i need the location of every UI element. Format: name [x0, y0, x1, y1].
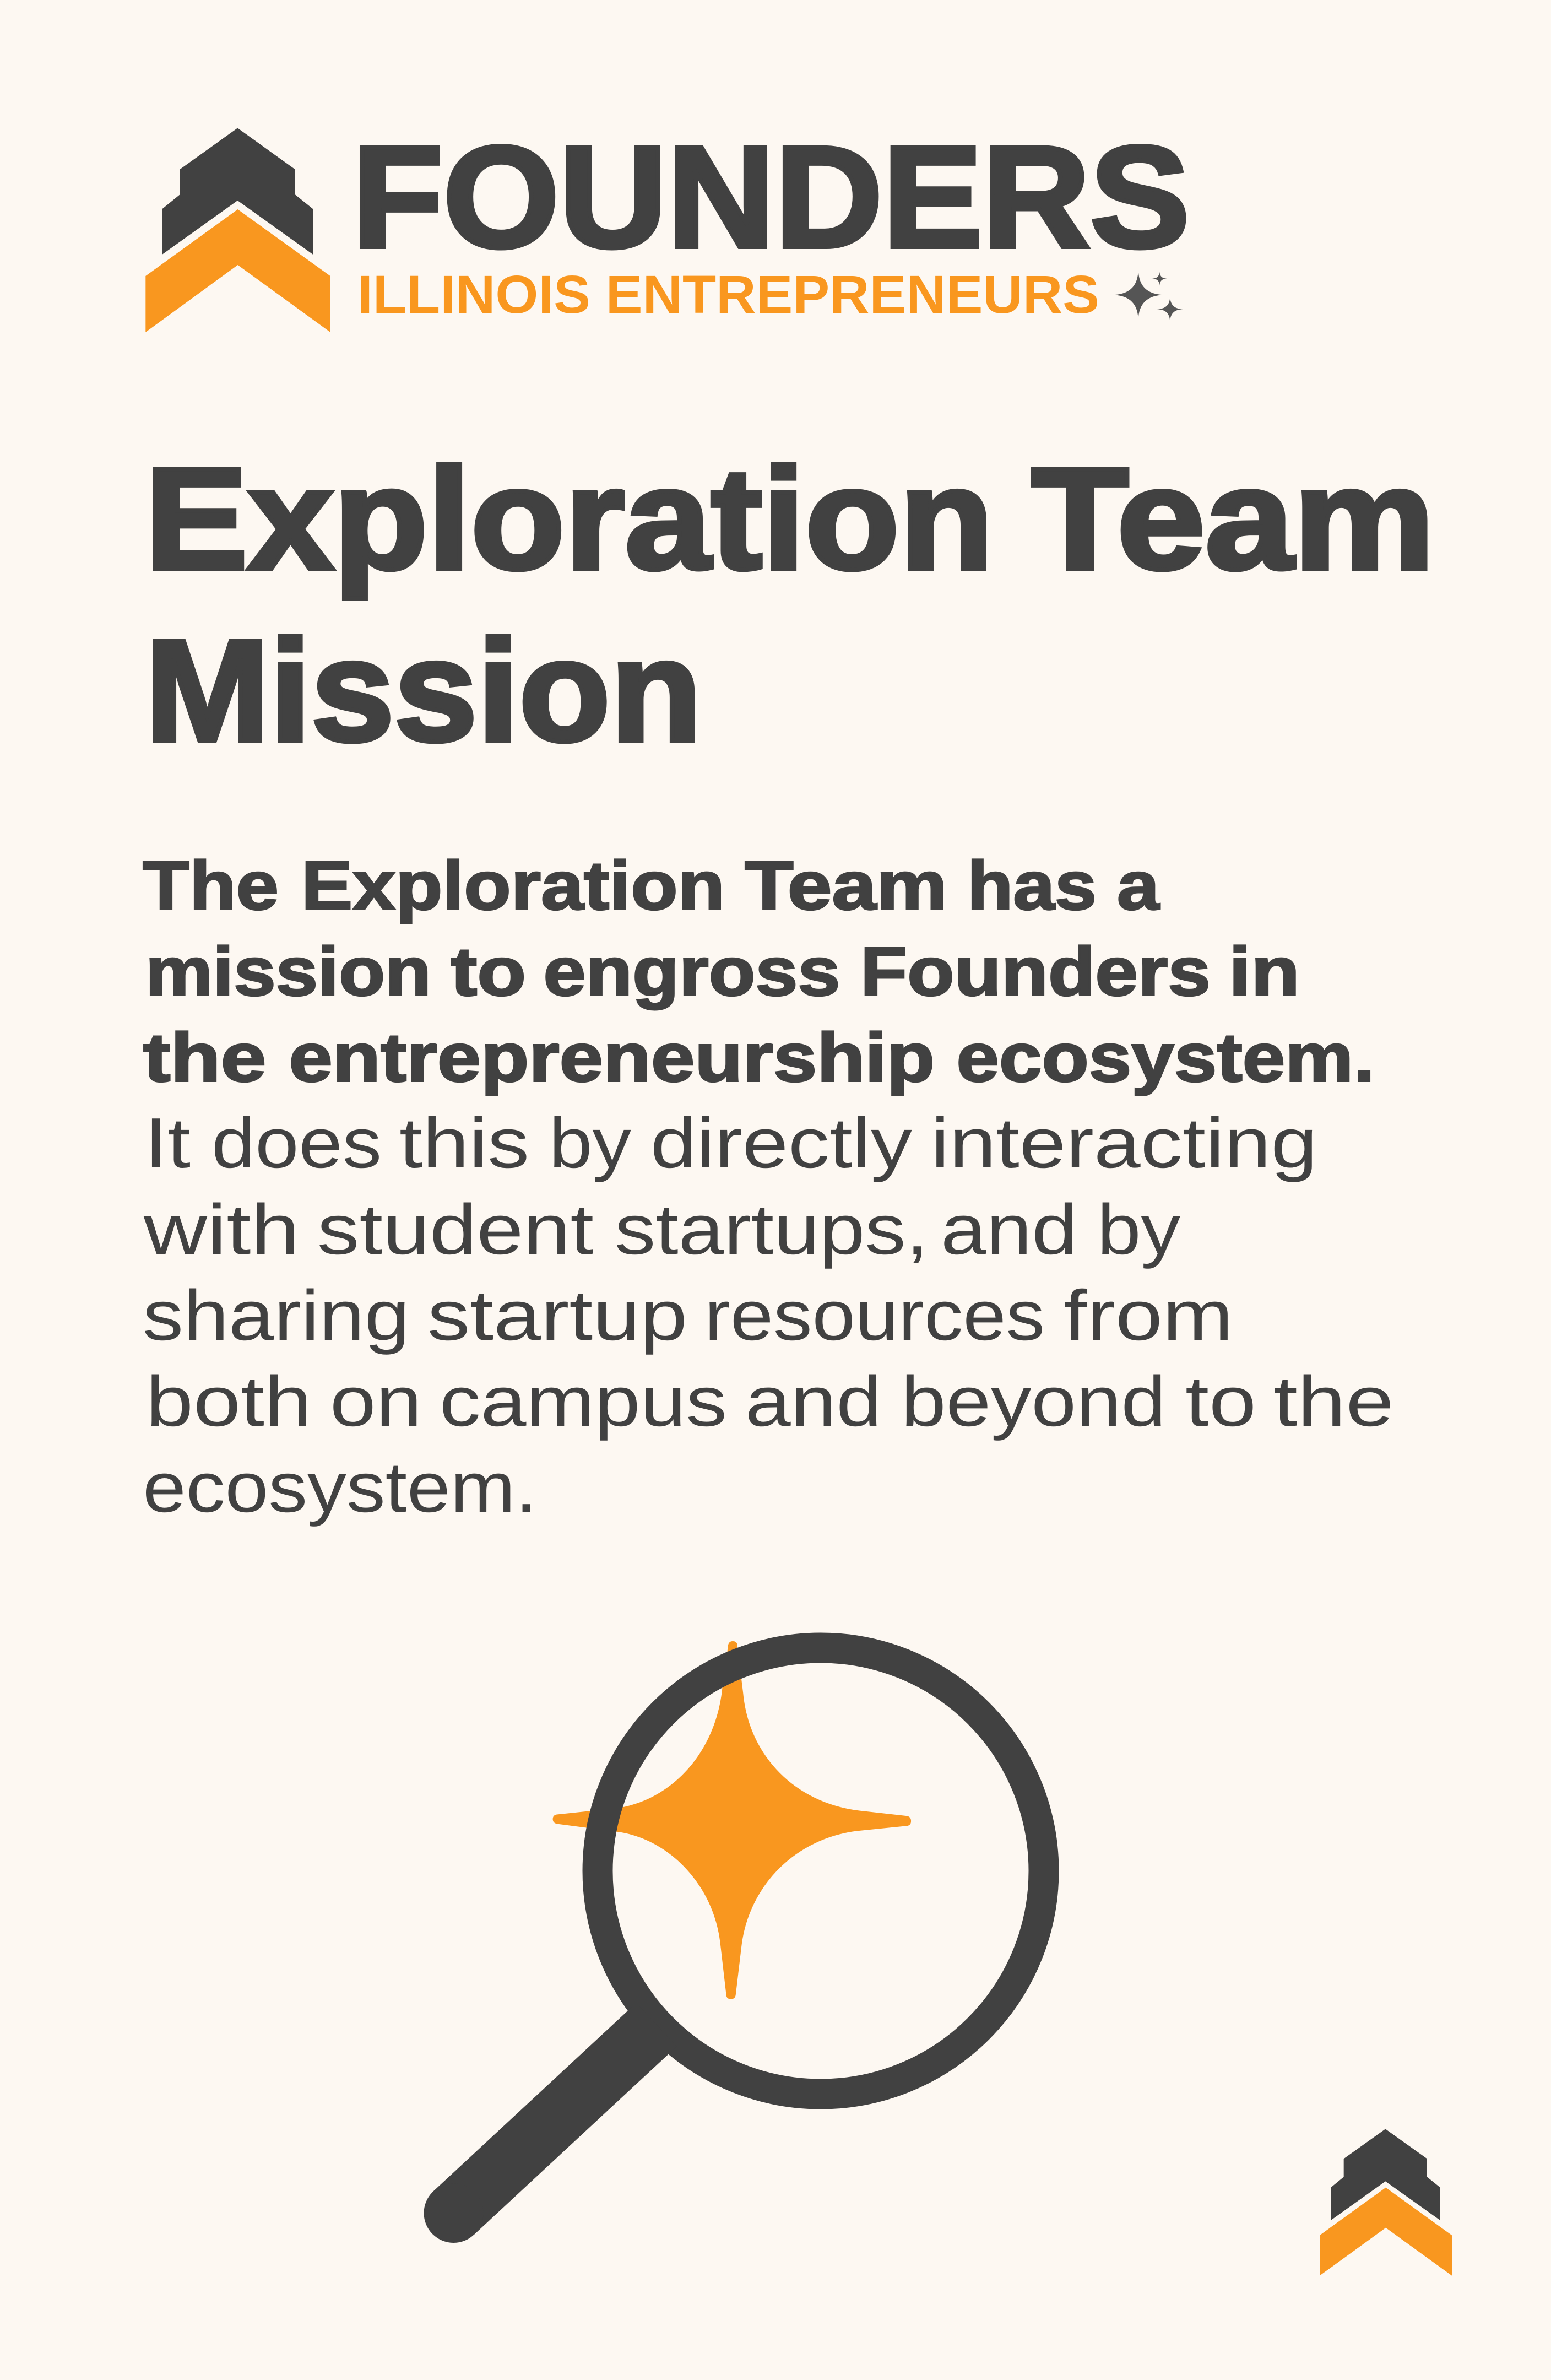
regular body text: It — [144, 1104, 191, 1183]
regular body text: and — [745, 1362, 882, 1441]
regular body text: on — [330, 1362, 422, 1441]
illustration: magnifying glass over sparkle — [424, 1641, 1044, 2243]
bold intro text: a — [1117, 847, 1160, 924]
regular body text: to — [1185, 1362, 1256, 1441]
regular body text: startups, — [615, 1190, 929, 1269]
regular body text: by — [549, 1104, 632, 1183]
icon: sparkles — [1112, 269, 1183, 322]
regular body text: interacting — [931, 1104, 1317, 1183]
regular body text: resources — [704, 1276, 1045, 1355]
title — [145, 438, 1435, 771]
bold intro text: to — [451, 933, 526, 1010]
regular body text: student — [317, 1190, 594, 1269]
icon: orange four-point star — [553, 1641, 911, 1999]
title line 1: Exploration — [145, 438, 994, 600]
bold intro text: mission — [145, 933, 431, 1010]
bold intro text: Team — [745, 847, 947, 924]
regular body text: campus — [440, 1362, 727, 1441]
regular body text: does — [212, 1104, 382, 1183]
bold intro text: ecosystem. — [956, 1019, 1375, 1096]
regular body text: this — [399, 1104, 529, 1183]
icon: magnifying glass — [424, 1648, 1044, 2243]
bold intro text — [143, 847, 1375, 1096]
regular body text: sharing — [143, 1276, 410, 1355]
regular body text: ecosystem. — [143, 1448, 537, 1527]
title line 2: Mission — [145, 610, 702, 771]
regular body text: directly — [650, 1104, 913, 1183]
header logo — [145, 116, 1190, 332]
bold intro text: the — [143, 1019, 267, 1096]
bold intro text: The — [143, 847, 279, 924]
regular body text: the — [1273, 1362, 1394, 1441]
title line 1: Team — [1032, 438, 1435, 599]
regular body text: both — [146, 1362, 312, 1441]
regular body text: and — [941, 1190, 1077, 1269]
regular body text: from — [1064, 1276, 1233, 1355]
bold intro text: has — [967, 847, 1097, 924]
bold intro text: Exploration — [301, 847, 725, 924]
wordmark: FOUNDERS: FOUNDERS — [352, 116, 1190, 278]
icon: footer chevron logo — [1320, 2129, 1452, 2276]
icon: double chevron logo — [145, 128, 330, 332]
bold intro text: Founders — [860, 933, 1211, 1010]
bold intro text: engross — [543, 933, 840, 1010]
bold intro text: entrepreneurship — [289, 1019, 935, 1096]
bold intro text: in — [1229, 933, 1300, 1010]
regular body text: by — [1097, 1190, 1181, 1269]
title line 1 — [145, 438, 1435, 600]
regular body text: startup — [427, 1276, 687, 1355]
mission paragraph — [143, 847, 1394, 1527]
regular body text: with — [143, 1190, 300, 1269]
regular body text: beyond — [901, 1362, 1166, 1441]
tagline: Illinois Entrepreneurs: ILLINOIS ENTREPRENEURS — [357, 264, 1099, 324]
regular body text — [143, 1104, 1394, 1527]
